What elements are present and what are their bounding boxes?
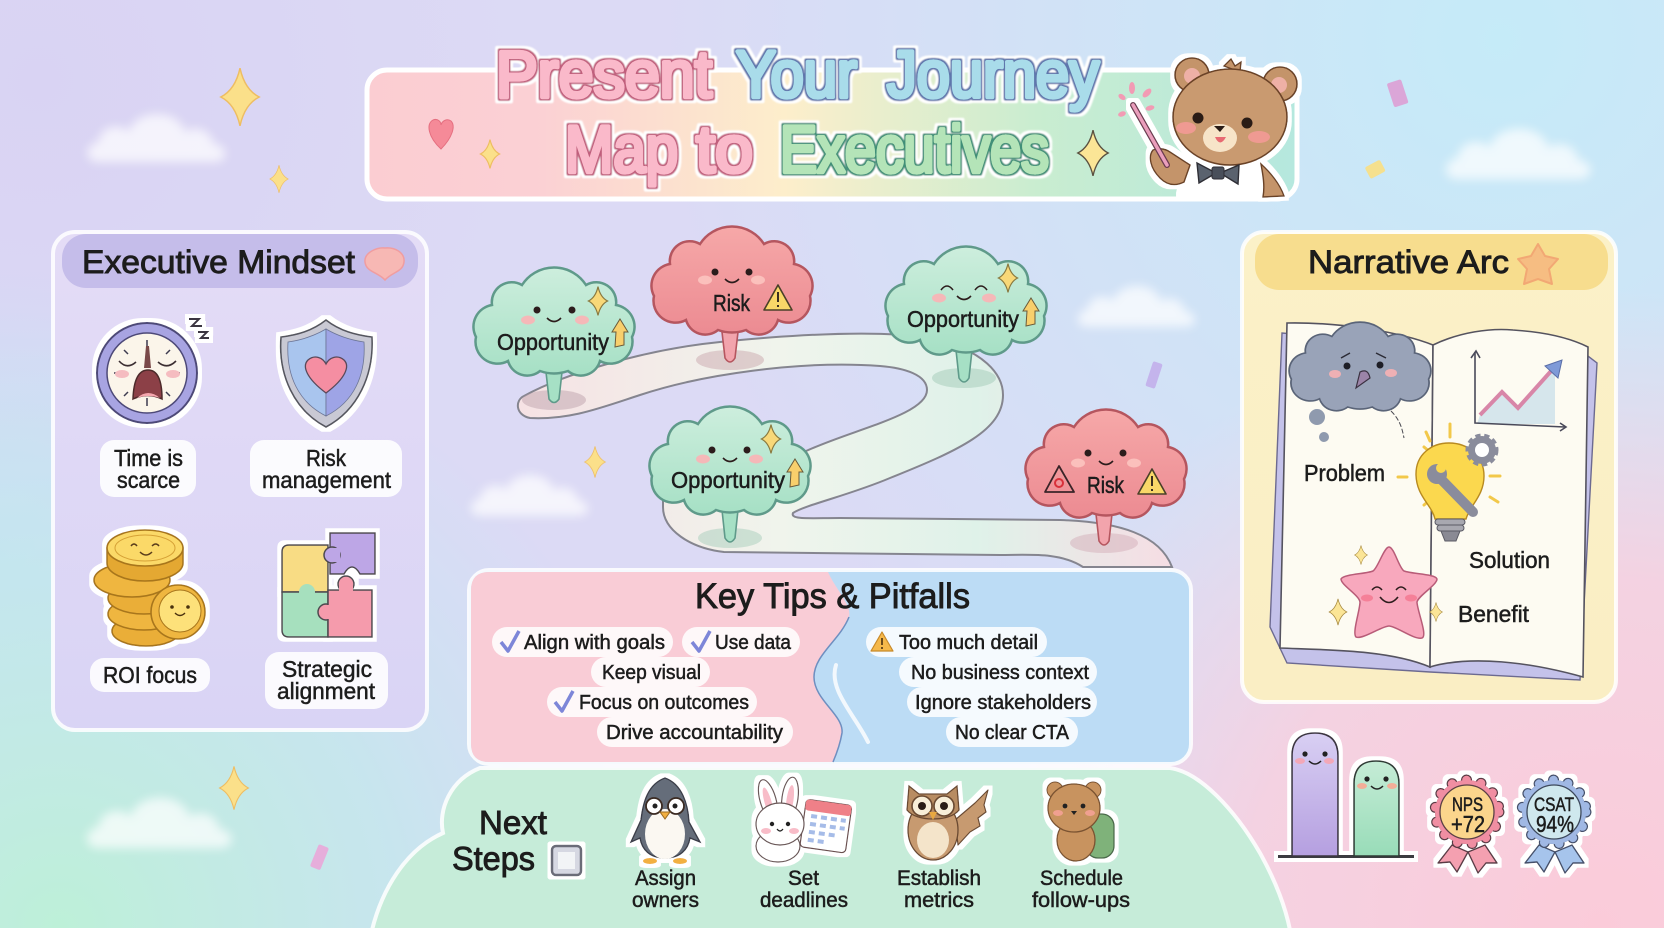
pin: risk 1: Risk [713, 290, 750, 316]
title text: Map [565, 112, 678, 186]
icon: checkbox [552, 846, 581, 875]
icon: large sparkle [1078, 130, 1108, 176]
pin: opportunity 1 [473, 267, 635, 410]
tip: drive accountability [597, 717, 793, 747]
heading: narrative arc: Narrative Arc [1308, 244, 1509, 280]
pin: opportunity 2: Opportunity [907, 306, 1019, 332]
icon: penguin [631, 778, 700, 864]
icon: lightbulb with wrench [1398, 424, 1500, 541]
bar chart: smiling bars [1278, 733, 1414, 858]
tip: focus on outcomes: Focus on outcomes [579, 692, 749, 714]
icon: bear with backpack [1047, 782, 1114, 861]
label pill: time is scarce [100, 440, 196, 497]
label: establish metrics [897, 867, 981, 912]
tip: focus on outcomes [547, 687, 757, 717]
tip: keep visual: Keep visual [602, 662, 701, 684]
label pill: time is scarce: Time is [114, 445, 183, 471]
heading: next steps: Steps [452, 840, 535, 877]
label: establish metrics: Establish [897, 867, 981, 890]
icon: owl [907, 786, 988, 860]
panel: key tips and pitfalls [469, 570, 1191, 764]
pin: risk 2 [1025, 409, 1187, 553]
heading: executive mindset: Executive Mindset [82, 244, 355, 280]
heading: next steps: Next [479, 804, 547, 841]
pitfall: too much detail [866, 627, 1047, 657]
tip: keep visual [591, 657, 710, 687]
label: set deadlines [760, 867, 848, 912]
label: set deadlines: deadlines [760, 889, 848, 912]
pin: opportunity 1: Opportunity [497, 329, 609, 355]
title text: Journey [887, 37, 1099, 111]
panel header band [62, 234, 418, 288]
bear presenter [1133, 58, 1297, 197]
panel: next steps [372, 768, 1290, 928]
title banner [367, 37, 1297, 199]
label: establish metrics: metrics [904, 889, 974, 912]
pitfall: no business context [899, 657, 1097, 687]
panel: narrative arc [1242, 232, 1616, 702]
label pill: roi focus [90, 658, 210, 692]
pitfall: ignore stakeholders [907, 687, 1097, 717]
title text [496, 37, 1099, 186]
label: schedule follow-ups: follow-ups [1032, 889, 1130, 912]
pin: risk 2: Risk [1087, 472, 1124, 498]
tip: align with goals: Align with goals [524, 632, 665, 654]
label pill: strategic alignment: Strategic [282, 656, 372, 682]
badge: csat: CSAT [1534, 795, 1574, 816]
panel: executive mindset [53, 232, 427, 730]
heading: key tips and pitfalls: Key Tips & Pitfalls [695, 577, 970, 616]
pitfall: ignore stakeholders: Ignore stakeholders [915, 692, 1091, 714]
icon: bunny with calendar [755, 776, 852, 862]
title text: Executives [780, 112, 1049, 186]
label: assign owners: owners [632, 889, 699, 912]
title text: Present [496, 37, 712, 111]
label: problem: Problem [1304, 460, 1385, 486]
panel header band [1255, 234, 1608, 290]
icon: smiling star [1329, 545, 1442, 638]
river divider [814, 617, 849, 762]
tip: use data: Use data [715, 632, 792, 654]
pin: risk 1 [651, 226, 813, 370]
label: benefit: Benefit [1458, 601, 1530, 627]
label: schedule follow-ups: Schedule [1040, 867, 1123, 890]
tip: use data [682, 627, 800, 657]
icon: heart [429, 119, 453, 149]
badge: csat: 94% [1536, 811, 1574, 837]
pitfall: no business context: No business context [911, 662, 1089, 684]
label pill: risk management [250, 440, 402, 497]
journey road [518, 334, 1172, 567]
label pill: strategic alignment [265, 652, 388, 709]
pin: opportunity 3 [649, 406, 811, 548]
illustration: open book [1270, 322, 1597, 680]
tip: drive accountability: Drive accountability [606, 722, 783, 744]
label: assign owners [632, 867, 699, 912]
icon: sleeping clock [97, 319, 209, 423]
label pill: risk management: management [262, 467, 392, 493]
badge: nps [1435, 780, 1499, 873]
pitfall: too much detail: Too much detail [899, 632, 1038, 654]
decorative clouds [87, 114, 1591, 848]
icon: puzzle [282, 533, 375, 637]
icon: pointer spark [1117, 82, 1155, 118]
badge: csat [1522, 780, 1586, 873]
icon: worried cloud [1289, 322, 1431, 442]
pin: opportunity 3: Opportunity [671, 467, 785, 493]
pitfall: no clear cta [946, 717, 1078, 747]
pitfall: no clear cta: No clear CTA [955, 722, 1070, 744]
label: solution: Solution [1469, 547, 1550, 573]
badge: nps: +72 [1451, 811, 1485, 837]
decorative sparkles [220, 68, 605, 810]
icon: small sparkle [480, 140, 500, 168]
chart: rising line [1471, 351, 1566, 431]
title text: Your [736, 37, 857, 111]
icon: brain [365, 248, 404, 280]
label pill: roi focus: ROI focus [103, 662, 197, 688]
label pill: time is scarce: scarce [117, 467, 180, 493]
icon: coin stack [94, 530, 205, 646]
icon: star [1518, 244, 1558, 284]
label: assign owners: Assign [635, 867, 696, 890]
tips half [471, 572, 849, 762]
pin: opportunity 2 [885, 246, 1047, 388]
title text: to [696, 112, 753, 186]
label: set deadlines: Set [788, 867, 819, 890]
tip: align with goals [492, 627, 673, 657]
confetti [310, 79, 1409, 870]
label: schedule follow-ups [1032, 867, 1130, 912]
label pill: strategic alignment: alignment [277, 678, 376, 704]
heading: next steps [452, 804, 547, 877]
label pill: risk management: Risk [306, 445, 346, 471]
badge: nps: NPS [1452, 795, 1483, 816]
icon: shield with heart [281, 320, 372, 427]
